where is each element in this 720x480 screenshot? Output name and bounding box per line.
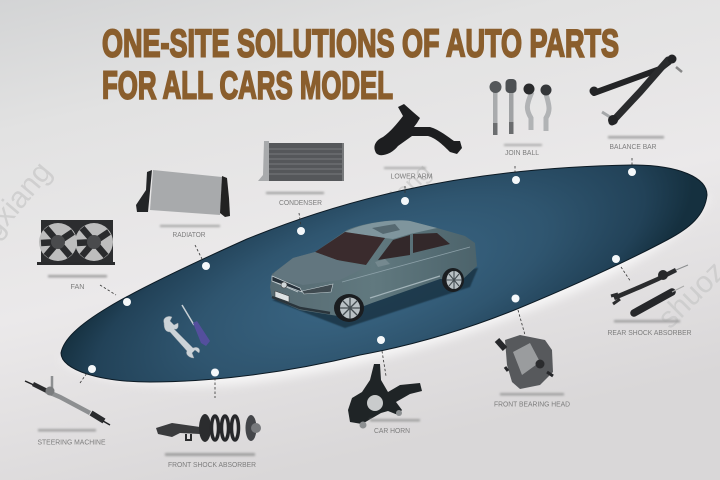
rod 2: [506, 79, 516, 134]
icon: screwdriver: [182, 305, 210, 346]
rod 4: [540, 84, 552, 131]
roof: [345, 220, 437, 239]
mirror: [375, 259, 390, 267]
part: front shock absorber: [156, 414, 261, 469]
label: FRONT BEARING HEAD: [494, 402, 570, 408]
rod 3: [524, 84, 534, 130]
side windows: [378, 233, 450, 260]
watermarks: [0, 156, 720, 335]
front wheel: [334, 294, 364, 322]
label: CONDENSER: [279, 200, 322, 207]
part: balance bar: [590, 54, 682, 151]
label: STEERING MACHINE: [38, 440, 106, 446]
watermarks: xiang: [377, 159, 437, 218]
hood: [272, 252, 366, 285]
part: steering machine: [25, 376, 110, 446]
sunroof: [372, 224, 400, 234]
tools: [164, 305, 210, 358]
rod 1: [490, 81, 502, 135]
part: condenser: [258, 141, 344, 207]
part: lower arm: [374, 104, 462, 180]
rear wheel: [442, 268, 464, 292]
bumper: [272, 297, 330, 313]
part: join ball: [490, 79, 552, 157]
windshield: [315, 232, 385, 265]
sill stripe: [370, 276, 440, 298]
oval platform: [61, 165, 710, 386]
label: JOIN BALL: [505, 150, 539, 157]
licence plate: [275, 291, 289, 302]
car body: [270, 220, 477, 316]
connectors: dots and dashed leads: [80, 158, 636, 398]
title: FOR ALL CARS MODEL: [102, 64, 393, 108]
label: LOWER ARM: [390, 174, 433, 180]
headlamp: [302, 284, 333, 294]
car shadow: [272, 268, 478, 328]
part: rear shock absorber: [608, 265, 692, 337]
part: front bearing head: [494, 335, 570, 408]
label: FAN: [70, 284, 84, 291]
label: BALANCE BAR: [610, 144, 656, 151]
part: car horn: [348, 364, 422, 435]
grille: [272, 276, 302, 292]
label: CAR HORN: [374, 428, 410, 435]
label: FRONT SHOCK ABSORBER: [168, 462, 256, 469]
label: RADIATOR: [172, 232, 206, 239]
part: radiator: [136, 170, 230, 239]
car: [270, 220, 478, 328]
part: fan: [37, 220, 115, 291]
label: REAR SHOCK ABSORBER: [608, 330, 692, 337]
title: [102, 22, 619, 108]
icon: wrench: [164, 316, 200, 358]
